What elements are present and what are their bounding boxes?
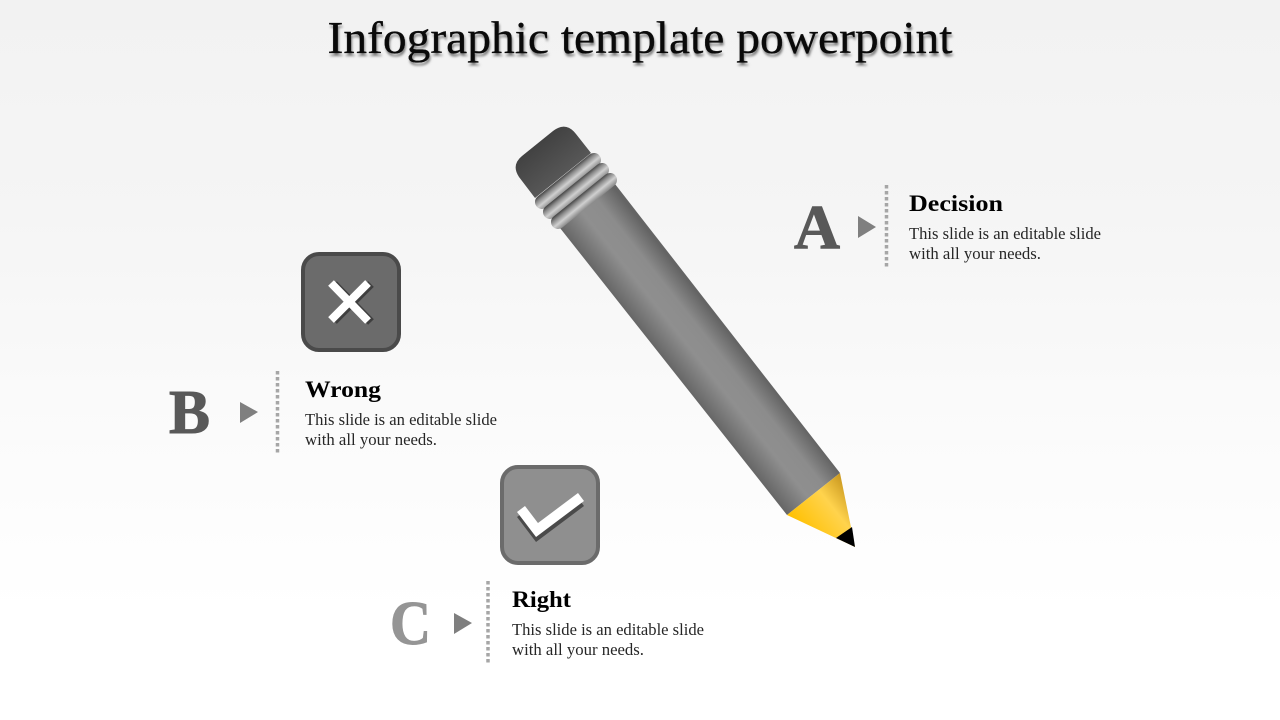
letter A: A: [794, 194, 840, 262]
icon: wrong cross: [303, 254, 399, 350]
group B: wrong: [169, 371, 497, 454]
text A: with all your needs.: [909, 244, 1041, 263]
icon: right check: [502, 467, 598, 563]
text B: This slide is an editable slide: [305, 410, 497, 429]
letter C: C: [390, 590, 431, 658]
text B: [305, 410, 497, 449]
text C: with all your needs.: [512, 640, 644, 659]
arrow A: [858, 216, 876, 238]
heading A: Decision: [909, 191, 1003, 216]
icon: pencil: [516, 127, 855, 547]
text C: This slide is an editable slide: [512, 620, 704, 639]
title: Infographic template powerpoint: [328, 15, 954, 66]
heading B: Wrong: [305, 377, 382, 402]
text C: [512, 620, 704, 659]
arrow B: [240, 402, 258, 423]
letter B: B: [169, 379, 210, 447]
group C: right: [390, 581, 704, 664]
heading C: Right: [512, 587, 571, 612]
title: Infographic template powerpoint: [328, 12, 953, 63]
text A: [909, 224, 1101, 263]
group A: decision: [794, 185, 1101, 268]
text B: with all your needs.: [305, 430, 437, 449]
text A: This slide is an editable slide: [909, 224, 1101, 243]
arrow C: [454, 613, 472, 634]
